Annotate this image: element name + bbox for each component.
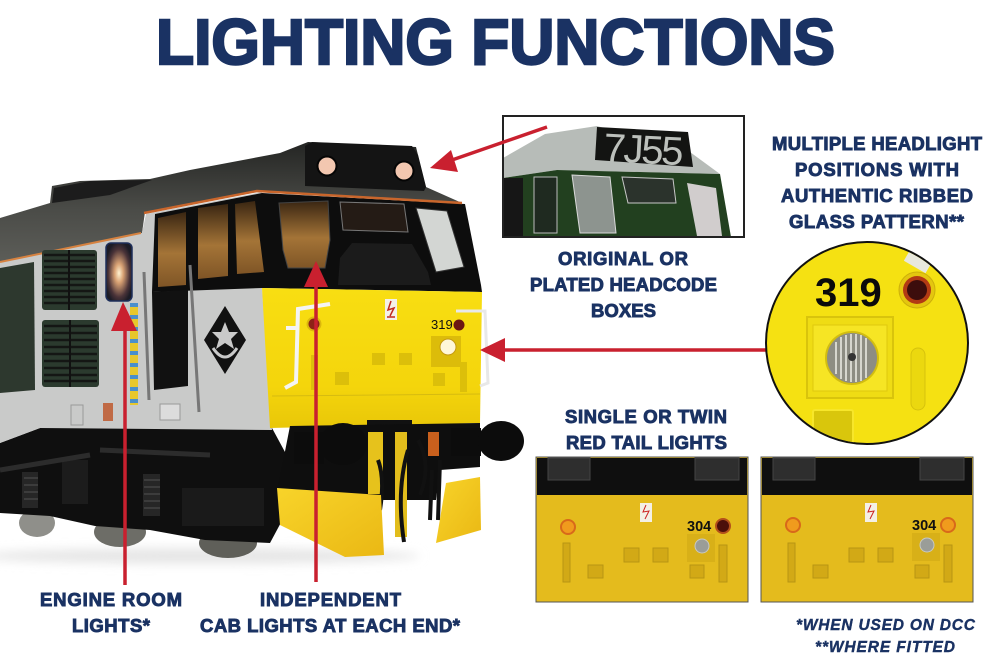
inset: single tail light: [536, 457, 748, 602]
number 319: 319: [431, 317, 453, 332]
inset: single tail light: 304: [687, 519, 711, 535]
black cab door: [152, 290, 188, 390]
chevron stripe: [130, 303, 138, 405]
label: engine room lights: [40, 589, 182, 636]
arrow: to headlight: [480, 338, 766, 362]
nose handrails: [285, 304, 330, 388]
title: LIGHTING FUNCTIONS: [156, 6, 835, 78]
cab window band: [152, 193, 482, 292]
body details: [71, 403, 180, 425]
heading: tail lights: [565, 406, 727, 453]
inset: headcode box: [503, 116, 744, 237]
body stripe: [0, 233, 141, 262]
label: cab lights: INDEPENDENT: [260, 589, 402, 610]
nose recesses: [311, 353, 467, 392]
handrails: [144, 265, 199, 412]
roof exhaust detail: [52, 180, 152, 203]
footnotes: **WHERE FITTED: [815, 639, 955, 656]
heading: headcode boxes: ORIGINAL OR: [558, 248, 688, 269]
headcode lights: [318, 156, 336, 176]
circular inset: headlight close-up: 319: [815, 271, 882, 315]
left tail light: [308, 318, 320, 330]
engine room vents: [0, 250, 99, 393]
engine room light window: [106, 243, 132, 301]
footnotes: *WHEN USED ON DCC: [796, 617, 976, 634]
heading: headcode boxes: PLATED HEADCODE: [530, 274, 717, 295]
inset: twin tail lights: 304: [912, 518, 936, 534]
lower cab panel: [338, 243, 431, 285]
locomotive illustration: [0, 142, 524, 564]
right snowplough: [436, 477, 481, 543]
right tail light: [454, 320, 464, 330]
label: engine room lights: LIGHTS*: [72, 615, 151, 636]
heading: headlight positions: GLASS PATTERN**: [789, 211, 965, 232]
headcode box: [305, 142, 426, 191]
yellow nose: [262, 288, 482, 428]
heading: headlight positions: [772, 133, 983, 232]
diamond emblem: [204, 306, 246, 374]
circular inset: headlight close-up: [766, 242, 968, 444]
buffer beam and couplings: [277, 423, 480, 542]
heading: headcode boxes: [530, 248, 717, 321]
inset: twin tail lights: [761, 457, 973, 602]
label: cab lights: CAB LIGHTS AT EACH END*: [200, 615, 461, 636]
arrow: to headcode box: [430, 127, 547, 172]
label: engine room lights: ENGINE ROOM: [40, 589, 182, 610]
arrow: to cab lights: [304, 261, 328, 582]
heading: headcode boxes: BOXES: [591, 300, 656, 321]
label: cab lights: [200, 589, 461, 636]
heading: tail lights: RED TAIL LIGHTS: [566, 432, 727, 453]
inset: headcode box: 7J55: [603, 126, 685, 174]
buffers: [294, 421, 524, 465]
wheels: [19, 509, 257, 558]
heading: headlight positions: AUTHENTIC RIBBED: [781, 185, 973, 206]
arrow: to engine room lights: [111, 302, 137, 585]
heading: tail lights: SINGLE OR TWIN: [565, 406, 727, 427]
cab roof stripe: [144, 191, 462, 213]
heading: headlight positions: MULTIPLE HEADLIGHT: [772, 133, 983, 154]
roof: [0, 142, 462, 262]
warning sign: [385, 299, 397, 320]
body side: [0, 192, 272, 443]
headlight unit: [431, 336, 461, 367]
cab windows: [158, 201, 464, 287]
footnotes: [796, 617, 976, 656]
left snowplough: [277, 488, 384, 557]
heading: headlight positions: POSITIONS WITH: [795, 159, 959, 180]
underframe and bogies: [0, 428, 300, 543]
